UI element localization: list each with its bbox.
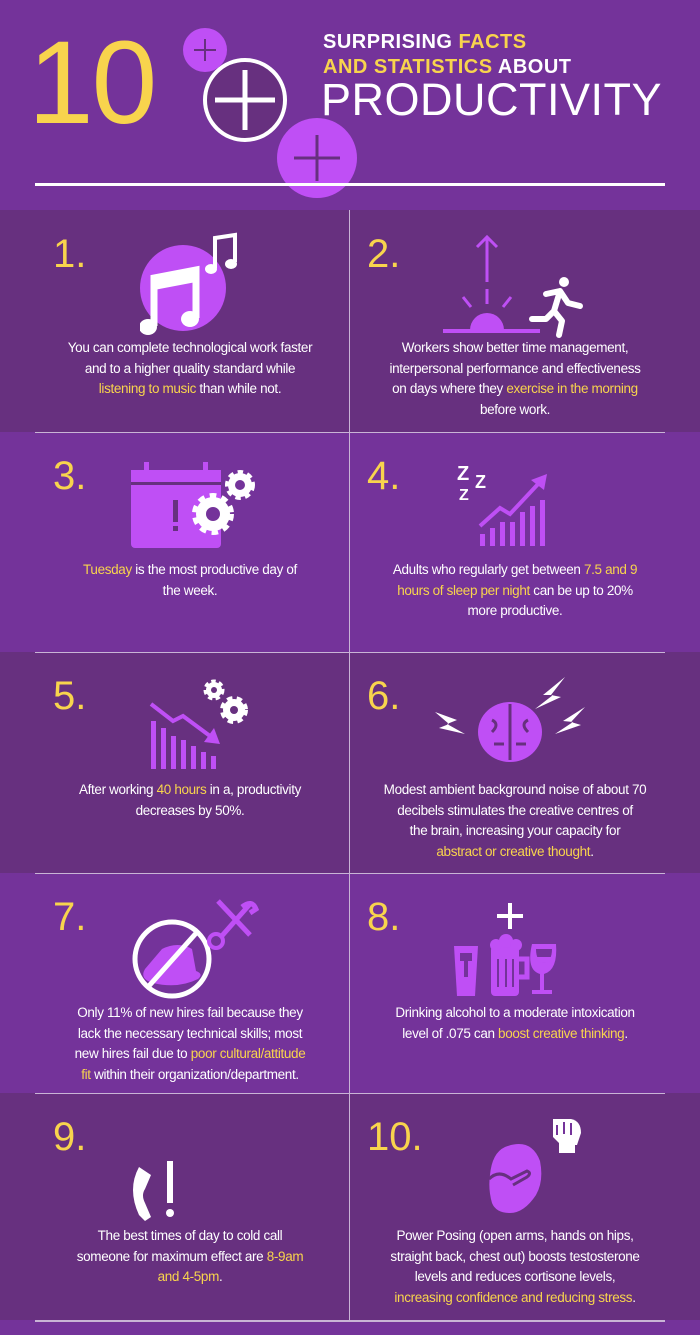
panel 10: Power Posing (open arms, hands on hips,: [396, 1228, 634, 1243]
icon: no hat, tools: [132, 899, 259, 998]
icon: drinks: [454, 903, 556, 996]
icon: declining chart gears: [150, 680, 248, 769]
panel 7: [53, 895, 306, 1082]
panel 2: Workers show better time management,: [402, 340, 628, 355]
panel 6: Modest ambient background noise of about 70: [384, 782, 646, 797]
panel 7: fit within their organization/department.: [81, 1066, 299, 1082]
panel 1: [53, 232, 312, 396]
panel 6: decibels stimulates the creative centres of: [397, 802, 633, 818]
icon: sunrise runner: [443, 235, 583, 338]
title: AND STATISTICS ABOUT: [323, 56, 572, 78]
panel 6: [367, 674, 646, 859]
panel 7: 7.: [53, 895, 86, 939]
title: SURPRISING FACTS: [323, 31, 527, 53]
panel 2: on days where they exercise in the morning: [392, 381, 638, 396]
panel 1: and to a higher quality standard while: [85, 360, 295, 376]
icon: phone exclamation: [133, 1161, 174, 1221]
panel 4: hours of sleep per night can be up to 20%: [397, 582, 633, 598]
icon: music: [140, 232, 237, 335]
panel 10: levels and reduces cortisone levels,: [415, 1269, 615, 1284]
panel 8: [367, 895, 635, 1041]
panel 4: [367, 454, 637, 618]
panel 2: [367, 232, 641, 416]
panel 2: before work.: [480, 402, 550, 416]
panel 3: the week.: [163, 582, 217, 598]
panel 7: Only 11% of new hires fail because they: [77, 1005, 303, 1020]
panel 3: Tuesday is the most productive day of: [83, 562, 297, 577]
panel 6: abstract or creative thought.: [436, 844, 594, 858]
title: [323, 31, 572, 78]
panel 5: After working 40 hours in a, productivity: [79, 782, 301, 797]
panel 10: increasing confidence and reducing stress.: [394, 1290, 636, 1304]
icon: sleep chart: Z: [457, 463, 469, 485]
panel 3: 3.: [53, 454, 86, 498]
panel 4: Adults who regularly get between 7.5 and 9: [393, 562, 637, 577]
panel 9: The best times of day to cold call: [98, 1228, 282, 1243]
panel 4: 4.: [367, 454, 400, 498]
big number 10: 10: [28, 17, 155, 149]
panel 1: listening to music than while not.: [99, 381, 281, 396]
panel 8: 8.: [367, 895, 400, 939]
panel 7: lack the necessary technical skills; most: [78, 1026, 302, 1040]
icon: sleep chart: Z: [459, 487, 469, 504]
panel 2: 2.: [367, 232, 400, 276]
header: PRODUCTIVITY: [321, 74, 662, 125]
row backgrounds: [0, 210, 700, 432]
panel 9: someone for maximum effect are 8-9am: [77, 1248, 303, 1264]
icon: sleep chart: Z: [475, 472, 486, 492]
panel 10: 10.: [367, 1115, 423, 1159]
panel 7: new hires fail due to poor cultural/attitude: [75, 1046, 305, 1061]
panel 5: [53, 674, 302, 818]
panel 3: [53, 454, 298, 598]
panel 8: level of .075 can boost creative thinking.: [402, 1026, 628, 1040]
header: [28, 17, 665, 198]
panel 9: [53, 1115, 303, 1284]
icon: sleep chart: [457, 463, 547, 546]
panel 10: straight back, chest out) boosts testosterone: [390, 1248, 640, 1264]
icon: brain with lightning: [435, 677, 585, 762]
panel 9: 9.: [53, 1115, 86, 1159]
panel 6: the brain, increasing your capacity for: [410, 823, 620, 838]
icon: face and fist: [489, 1119, 581, 1213]
panel 10: [367, 1115, 640, 1305]
panel 8: Drinking alcohol to a moderate intoxication: [395, 1005, 635, 1020]
panel 1: You can complete technological work faster: [68, 340, 312, 355]
panel 1: 1.: [53, 232, 86, 276]
icon: calendar gears: [131, 462, 255, 548]
panel 9: and 4-5pm.: [158, 1269, 222, 1284]
panel 4: more productive.: [468, 603, 562, 618]
panel 5: decreases by 50%.: [136, 802, 244, 818]
panel 5: 5.: [53, 674, 86, 718]
icon: plus circles: [183, 28, 357, 198]
panel 6: 6.: [367, 674, 400, 718]
panel 2: interpersonal performance and effectiveness: [389, 360, 641, 376]
